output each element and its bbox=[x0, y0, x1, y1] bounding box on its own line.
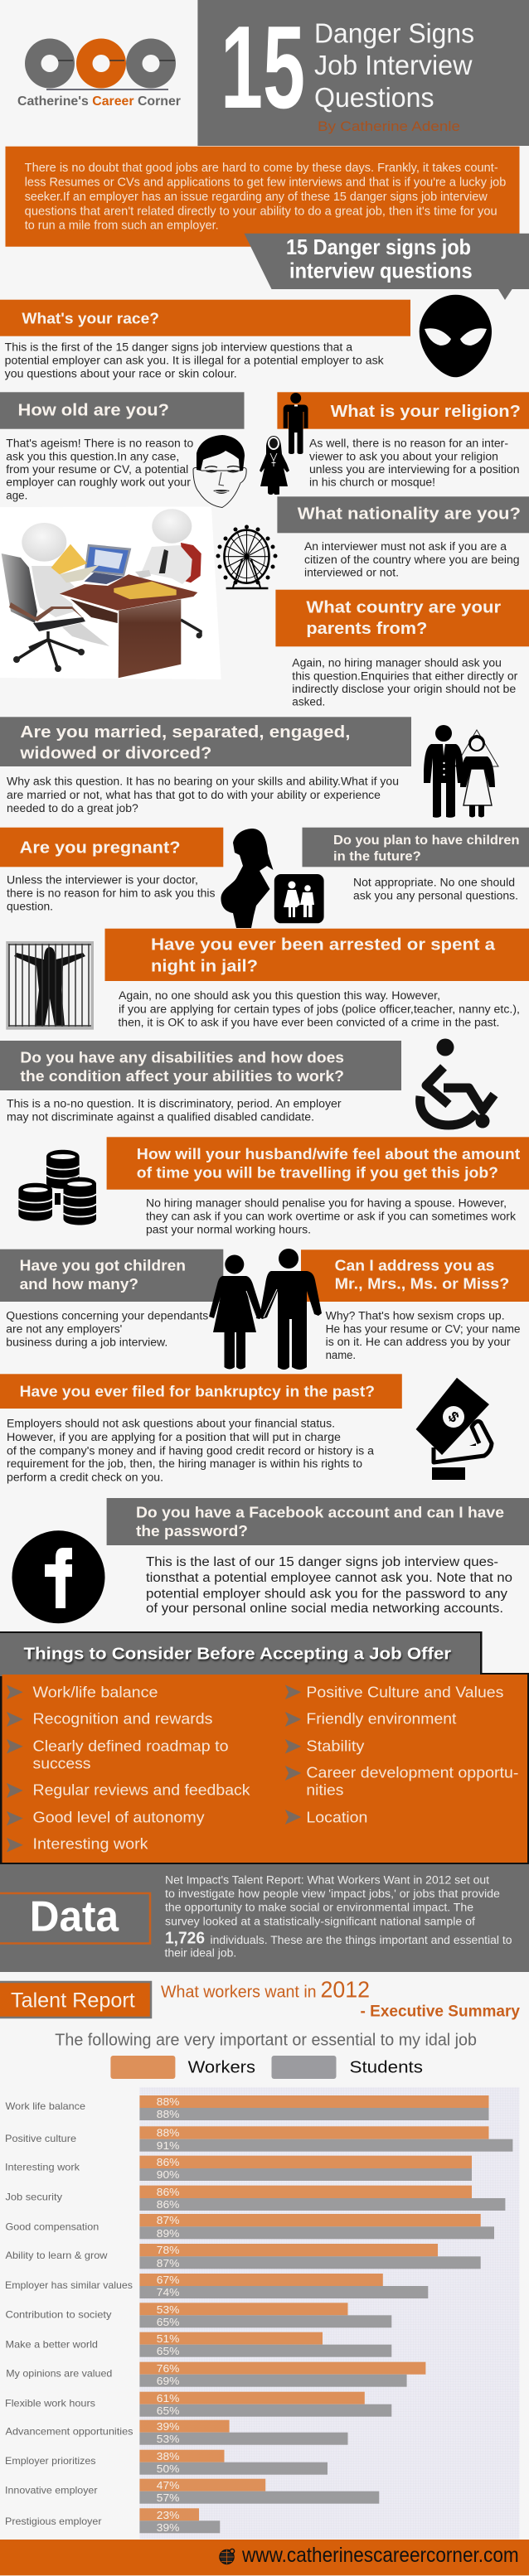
row: my opinions are valued bbox=[6, 2362, 425, 2387]
icon: bride and groom bbox=[424, 725, 498, 818]
legend: Workers bbox=[188, 2059, 255, 2077]
left list: Recognition and rewards bbox=[33, 1711, 212, 1728]
panel: parents' country: parents from? bbox=[306, 620, 427, 638]
panel: introduction: questions that aren't related directly to your ability to do a great job, then it's time for you bbox=[25, 205, 497, 218]
panel: form of address: Mr., Mrs., Ms. or Miss? bbox=[335, 1276, 509, 1293]
body text: of the company's money and if having good credit record or history is a bbox=[7, 1444, 375, 1457]
panel: bankruptcy bbox=[0, 1374, 492, 1483]
panel: age bbox=[0, 392, 246, 507]
icon: couple holding hands bbox=[209, 1249, 322, 1370]
row: innovative employer: 57% bbox=[157, 2491, 180, 2504]
icon: hand holding banknote bbox=[416, 1378, 492, 1480]
body text: interviewed or not. bbox=[304, 566, 399, 578]
survey description: their ideal job. bbox=[164, 1947, 236, 1960]
desk bbox=[60, 574, 197, 678]
byline: By Catherine Adenle bbox=[318, 118, 460, 134]
heading: Have you got children bbox=[20, 1257, 186, 1274]
left list: Regular reviews and feedback bbox=[33, 1782, 251, 1799]
body text: Again, no one should ask you this question this way. However, bbox=[119, 989, 440, 1002]
icon: priest bbox=[284, 393, 308, 454]
body text: Questions concerning your dependants bbox=[6, 1309, 209, 1322]
chart heading: The following are very important or essential to my idal job bbox=[55, 2031, 477, 2049]
row: good compensation: Good compensation bbox=[5, 2221, 99, 2233]
row: employer prioritizes bbox=[5, 2450, 328, 2475]
body text: Unless the interviewer is your doctor, bbox=[7, 874, 198, 887]
panel: Facebook: the password? bbox=[136, 1523, 248, 1539]
row: prestigious employer: Prestigious employer bbox=[5, 2516, 101, 2527]
heading: Are you pregnant? bbox=[20, 839, 181, 857]
body text: potential employer can ask you. It is illegal for a potential employer to ask bbox=[5, 354, 384, 366]
left list: success bbox=[33, 1756, 91, 1772]
panel: plans for children bbox=[274, 828, 529, 923]
speech bubble heading bbox=[244, 234, 529, 300]
row: positive culture: 91% bbox=[157, 2139, 180, 2152]
right list: Stability bbox=[306, 1737, 364, 1754]
footer bbox=[0, 2540, 529, 2575]
logo: Catherine's Career Corner: Catherine's Career Corner bbox=[17, 94, 181, 109]
body text: Why? That's how sexism crops up. bbox=[326, 1310, 505, 1322]
row: job security: 86% bbox=[157, 2186, 180, 2198]
panel: introduction: less Resumes or CVs and applications to get few interviews and that is if you're a lucky job bbox=[25, 176, 506, 190]
report title: - Executive Summary bbox=[360, 2003, 520, 2020]
heading: Have you ever filed for bankruptcy in the past? bbox=[20, 1384, 375, 1400]
body text: Why ask this question. It has no bearing on your skills and ability.What if you bbox=[7, 776, 399, 788]
body text: That's ageism! There is no reason to bbox=[6, 437, 193, 449]
row: job security: 86% bbox=[157, 2198, 180, 2211]
row: ability to learn bbox=[5, 2244, 481, 2269]
row: prestigious employer: 39% bbox=[157, 2521, 180, 2534]
body text: business during a job interview. bbox=[6, 1336, 167, 1348]
body text: are married or not, what has that got to do with your ability or experience bbox=[7, 789, 381, 801]
body text bbox=[7, 776, 399, 814]
row: make a better world: 65% bbox=[157, 2345, 180, 2357]
panel: race bbox=[0, 295, 492, 379]
body text bbox=[7, 874, 216, 912]
row: advancement opportunities bbox=[5, 2420, 348, 2445]
report title bbox=[161, 1977, 520, 2020]
body text bbox=[5, 341, 384, 379]
panel: arrest bbox=[6, 929, 529, 1030]
row: interesting work: 90% bbox=[157, 2168, 180, 2181]
talent report label bbox=[0, 1982, 151, 2018]
panel: disabilities: the condition affect your abilities to work? bbox=[20, 1068, 344, 1085]
panel: arrest: night in jail? bbox=[151, 957, 258, 975]
bar chart: workers vs students bbox=[5, 2087, 519, 2539]
row: employer has similar values: Employer has similar values bbox=[5, 2279, 133, 2291]
speech bubble heading: interview questions bbox=[289, 258, 473, 283]
survey description bbox=[164, 1873, 512, 1960]
icon: hand holding banknote: $ bbox=[444, 1408, 463, 1426]
body text: No hiring manager should penalise you for having a spouse. However, bbox=[146, 1197, 507, 1210]
icon: coin stacks bbox=[18, 1150, 96, 1225]
row: good compensation: 89% bbox=[157, 2227, 180, 2240]
row: my opinions are valued: 69% bbox=[157, 2375, 180, 2387]
panel: pregnancy bbox=[0, 828, 274, 928]
body text bbox=[292, 657, 518, 708]
heading: How will your husband/wife feel about the amount bbox=[137, 1146, 520, 1162]
data label box bbox=[0, 1893, 150, 1944]
body text bbox=[146, 1555, 512, 1616]
body text: of your personal online social media networking accounts. bbox=[146, 1602, 503, 1616]
data label box: Data bbox=[30, 1893, 119, 1941]
body text: this question.Enquiries that either directly or bbox=[292, 669, 518, 682]
body text: ask you this question.In any case, bbox=[6, 450, 179, 462]
row: flexible work hours bbox=[5, 2392, 391, 2417]
panel: data bbox=[0, 1864, 529, 1972]
body text: question. bbox=[7, 900, 53, 912]
report title: 2012 bbox=[320, 1977, 370, 2003]
body text bbox=[7, 1098, 342, 1124]
heading: What's your race? bbox=[22, 311, 159, 327]
row: contribution to society: 65% bbox=[157, 2316, 180, 2328]
heading: What nationality are you? bbox=[298, 505, 521, 524]
body text bbox=[6, 1309, 209, 1348]
speech bubble heading: 15 Danger signs job bbox=[286, 234, 471, 259]
row: ability to learn: Ability to learn & grow bbox=[5, 2250, 108, 2261]
panel: parents' country bbox=[275, 590, 529, 708]
right list: Friendly environment bbox=[306, 1711, 456, 1728]
panel: introduction: seeker.If an employer has an issue regarding any of these 15 danger signs job interview bbox=[25, 191, 488, 204]
title: Questions bbox=[314, 82, 434, 113]
icon: pregnant woman silhouette bbox=[221, 829, 274, 928]
body text: age. bbox=[6, 490, 27, 502]
folders on desk bbox=[114, 582, 177, 599]
panel: form of address bbox=[301, 1249, 529, 1361]
body text: requirement for the job, then, the hiring manager is within his rights to bbox=[7, 1457, 362, 1470]
row: ability to learn: 87% bbox=[157, 2257, 180, 2269]
left list: Interesting work bbox=[33, 1836, 149, 1853]
heading: Have you ever been arrested or spent a bbox=[151, 936, 496, 955]
body text: then, it is OK to ask if you have ever been convicted of a crime in the past. bbox=[118, 1016, 499, 1028]
panel: introduction bbox=[5, 147, 519, 247]
row: interesting work bbox=[5, 2156, 472, 2181]
row: make a better world: 51% bbox=[157, 2332, 180, 2345]
body text: This is a no-no question. It is discriminatory, period. An employer bbox=[7, 1098, 342, 1110]
right list bbox=[306, 1684, 518, 1825]
body text bbox=[7, 1417, 375, 1483]
right list: Career development opportu- bbox=[306, 1764, 518, 1781]
body text: This is the first of the 15 danger signs job interview questions that a bbox=[5, 341, 353, 353]
body text: perform a credit check on you. bbox=[7, 1471, 163, 1483]
body text: unless you are interviewing for a position bbox=[309, 463, 519, 476]
body text: needed to do a great job? bbox=[7, 802, 138, 814]
body text bbox=[309, 437, 519, 489]
row: good compensation bbox=[5, 2214, 494, 2240]
body text: Employers should not ask questions about your financial status. bbox=[7, 1417, 335, 1429]
right list: Positive Culture and Values bbox=[306, 1684, 503, 1700]
legend: Students bbox=[350, 2059, 423, 2077]
row: interesting work: Interesting work bbox=[5, 2161, 80, 2172]
body text: Not appropriate. No one should bbox=[353, 876, 515, 888]
title: Danger Signs bbox=[314, 18, 474, 49]
icon: Facebook logo bbox=[12, 1530, 104, 1623]
row: employer has similar values: 67% bbox=[157, 2274, 180, 2286]
row: make a better world: Make a better world bbox=[5, 2338, 98, 2350]
row: flexible work hours: Flexible work hours bbox=[5, 2398, 95, 2409]
row: my opinions are valued: 76% bbox=[157, 2362, 180, 2375]
row: contribution to society: 53% bbox=[157, 2303, 180, 2316]
body text: ask you any personal questions. bbox=[353, 890, 518, 902]
body text: from your resume or CV, a potential bbox=[6, 463, 188, 476]
row: interesting work: 86% bbox=[157, 2156, 180, 2168]
heading: Are you married, separated, engaged, bbox=[20, 723, 350, 742]
panel: children count bbox=[0, 1249, 223, 1348]
logo: Catherine's Career Corner bbox=[17, 38, 181, 109]
row: positive culture bbox=[5, 2126, 512, 2152]
left list: Work/life balance bbox=[33, 1684, 158, 1700]
talent report label: Talent Report bbox=[11, 1989, 135, 2013]
body text: viewer to ask you about your religion bbox=[309, 450, 498, 462]
body text bbox=[304, 540, 520, 578]
panel: disabilities bbox=[0, 1039, 494, 1129]
body text bbox=[326, 1310, 521, 1361]
icon: alien mask bbox=[420, 295, 492, 377]
body text bbox=[353, 876, 518, 902]
body text bbox=[6, 437, 193, 502]
row: contribution to society: Contribution to society bbox=[5, 2309, 111, 2321]
body text bbox=[118, 989, 520, 1028]
row: work life balance: 88% bbox=[157, 2108, 180, 2120]
row: job security bbox=[5, 2186, 505, 2211]
row: ability to learn: 78% bbox=[157, 2244, 180, 2256]
body text: name. bbox=[326, 1349, 356, 1361]
panel: things to consider bbox=[0, 1631, 529, 1864]
panel: plans for children: in the future? bbox=[333, 849, 421, 863]
body text: past your normal working hours. bbox=[146, 1223, 311, 1235]
row: advancement opportunities: 53% bbox=[157, 2433, 180, 2445]
panel: Facebook bbox=[12, 1498, 529, 1623]
row: employer has similar values: 74% bbox=[157, 2286, 180, 2298]
row: advancement opportunities: 39% bbox=[157, 2420, 180, 2433]
icon: globe bbox=[220, 2549, 235, 2564]
body text: He has your resume or CV; your name bbox=[326, 1322, 521, 1335]
row: work life balance: 88% bbox=[157, 2095, 180, 2108]
body text: tionsthat a potential employee cannot ask you. Note that no bbox=[146, 1571, 512, 1585]
heading: How old are you? bbox=[18, 402, 169, 420]
header panel bbox=[197, 0, 529, 146]
heading: What country are your bbox=[306, 598, 501, 616]
row: prestigious employer: 23% bbox=[157, 2509, 180, 2521]
body text: in his church or mosque! bbox=[309, 476, 435, 489]
title: Job Interview bbox=[314, 50, 473, 80]
row: positive culture: Positive culture bbox=[5, 2133, 76, 2144]
yellow folder and paper bbox=[51, 544, 99, 582]
body text: This is the last of our 15 danger signs job interview ques- bbox=[146, 1555, 498, 1569]
panel: introduction: to run a mile from such an employer. bbox=[25, 220, 219, 233]
body text: there is no reason for him to ask you this bbox=[7, 887, 216, 900]
right list: nities bbox=[306, 1782, 343, 1799]
row: employer prioritizes: 50% bbox=[157, 2462, 180, 2475]
left figure bbox=[9, 523, 109, 646]
panel: travelling: of time you will be travelling if you get this job? bbox=[137, 1165, 498, 1182]
illustration: job interview scene bbox=[0, 507, 221, 679]
body text: may not discriminate against a qualified disabled candidate. bbox=[7, 1111, 314, 1124]
left office chair bbox=[2, 553, 85, 672]
icon: man's face bbox=[193, 435, 246, 507]
row: make a better world bbox=[5, 2332, 391, 2357]
body text: if you are applying for certain types of jobs (police officer,teacher, nanny etc.), bbox=[119, 1003, 520, 1016]
right chair castor and red chair back bbox=[181, 543, 202, 638]
heading: What is your religion? bbox=[331, 403, 521, 421]
body text: An interviewer must not ask if you are a bbox=[304, 540, 507, 553]
body text: employer can roughly work out your bbox=[6, 476, 191, 489]
body text: indirectly disclose your origin should not be bbox=[292, 683, 516, 695]
panel: marital status: widowed or divorced? bbox=[19, 745, 211, 763]
body text: you questions about your race or skin colour. bbox=[5, 367, 237, 379]
arrow bullets bbox=[7, 1685, 301, 1853]
row: work life balance bbox=[5, 2095, 489, 2120]
left list bbox=[33, 1684, 251, 1853]
icon: ferris wheel bbox=[216, 525, 277, 588]
row: prestigious employer bbox=[5, 2508, 220, 2534]
body text: asked. bbox=[292, 696, 325, 708]
title number: 15 bbox=[221, 2, 305, 133]
icon: man behind bars bbox=[6, 941, 94, 1030]
row: flexible work hours: 65% bbox=[157, 2404, 180, 2417]
heading: Do you plan to have children bbox=[333, 834, 519, 848]
row: innovative employer: 47% bbox=[157, 2479, 180, 2491]
right figure bbox=[135, 509, 192, 584]
row: my opinions are valued: My opinions are valued bbox=[6, 2368, 112, 2380]
report title: What workers want in bbox=[161, 1984, 317, 2002]
body text: As well, there is no reason for an inter- bbox=[309, 437, 508, 449]
row: employer has similar values bbox=[5, 2274, 428, 2298]
body text: is on it. He can address you by your bbox=[326, 1336, 511, 1348]
survey description: Net Impact's Talent Report: What Workers Want in 2012 set out bbox=[165, 1873, 489, 1886]
left list: Good level of autonomy bbox=[33, 1809, 204, 1825]
body text: are not any employers' bbox=[6, 1322, 122, 1335]
laptop bbox=[85, 544, 131, 584]
heading: Things to Consider Before Accepting a Job Offer bbox=[23, 1644, 451, 1663]
heading: Do you have a Facebook account and can I have bbox=[136, 1505, 504, 1521]
survey description: to investigate how people view 'impact jobs,' or jobs that provide bbox=[165, 1887, 500, 1900]
panel: travelling bbox=[18, 1137, 529, 1235]
legend bbox=[110, 2056, 423, 2079]
body text: potential employer should ask you for the password to any bbox=[146, 1587, 507, 1601]
body text bbox=[146, 1197, 516, 1235]
icon: children sign bbox=[274, 874, 324, 923]
panel: nationality bbox=[216, 496, 529, 588]
icon: wheelchair bbox=[420, 1039, 494, 1129]
survey description: 1,726 bbox=[165, 1930, 205, 1948]
survey description: individuals. These are the things important and essential to bbox=[211, 1934, 512, 1946]
row: contribution to society bbox=[5, 2303, 391, 2328]
row: good compensation: 87% bbox=[157, 2214, 180, 2226]
row: employer prioritizes: 38% bbox=[157, 2450, 180, 2462]
body text: citizen of the country where you are being bbox=[304, 553, 520, 566]
survey description: the opportunity to make social or environmental impact. The bbox=[165, 1902, 473, 1914]
body text: they can ask if you can work overtime or ask if you can sometimes work bbox=[146, 1211, 516, 1223]
row: innovative employer: Innovative employer bbox=[5, 2485, 98, 2496]
title bbox=[314, 18, 474, 113]
panel: religion bbox=[260, 392, 529, 495]
heading: Do you have any disabilities and how does bbox=[20, 1049, 344, 1066]
row: advancement opportunities: Advancement opportunities bbox=[5, 2426, 133, 2438]
row: work life balance: Work life balance bbox=[5, 2100, 85, 2112]
row: positive culture: 88% bbox=[157, 2126, 180, 2139]
body text: Again, no hiring manager should ask you bbox=[292, 657, 502, 669]
right list: Location bbox=[306, 1809, 367, 1825]
panel: introduction: There is no doubt that good jobs are hard to come by these days. Frankly, it takes count- bbox=[25, 162, 498, 175]
row: employer prioritizes: Employer prioritizes bbox=[5, 2455, 96, 2467]
left list: Clearly defined roadmap to bbox=[33, 1737, 229, 1754]
body text: However, if you are applying for a position that will put in charge bbox=[7, 1431, 341, 1443]
row: innovative employer bbox=[5, 2479, 379, 2504]
panel: marital status bbox=[0, 717, 498, 818]
survey description: survey looked at a statistically-significant national sample of bbox=[165, 1915, 475, 1927]
panel: children count: and how many? bbox=[20, 1276, 138, 1293]
row: flexible work hours: 61% bbox=[157, 2392, 180, 2404]
row: job security: Job security bbox=[5, 2191, 62, 2202]
heading: Can I address you as bbox=[335, 1257, 494, 1274]
icon: nun bbox=[260, 436, 289, 495]
